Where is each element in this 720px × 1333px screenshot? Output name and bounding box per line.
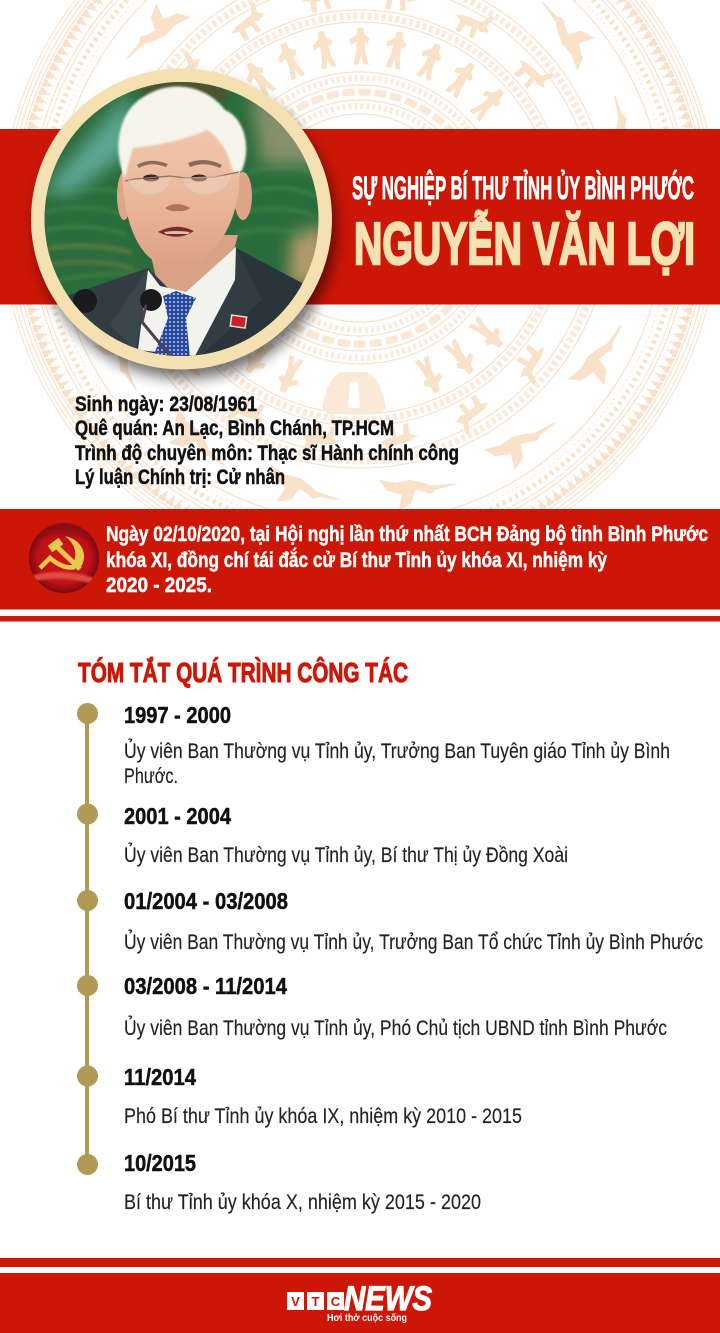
- portrait: [31, 68, 336, 379]
- drum figures: people ring: [245, 28, 504, 394]
- background: bronze drum ornament: [12, 0, 708, 509]
- palm fronds: [46, 167, 316, 280]
- timeline item 2001 - 2004: [77, 803, 568, 867]
- timeline item 11/2014: [77, 1064, 522, 1128]
- title text: [352, 170, 695, 277]
- tie: [153, 291, 196, 357]
- timeline item 10/2015: [77, 1150, 481, 1214]
- logo: VTC News: C: [331, 1294, 341, 1309]
- red banner: [0, 509, 720, 622]
- icon: party flag with hammer and sickle: [29, 522, 99, 593]
- timeline: [77, 702, 703, 1214]
- personal info block: [75, 393, 459, 489]
- personal info block: Sinh ngày: 23/08/1961: [75, 393, 257, 416]
- logo: VTC News: T: [312, 1294, 320, 1309]
- footer: [0, 1258, 720, 1333]
- timeline axis: [85, 713, 89, 1165]
- timeline item 01/2004 - 03/2008: [77, 888, 703, 954]
- timeline item 1997 - 2000: Phước.: [124, 765, 178, 788]
- hair: [118, 87, 246, 178]
- mouth: [158, 227, 194, 237]
- timeline item 03/2008 - 11/2014: [77, 973, 667, 1040]
- timeline item 01/2004 - 03/2008: 01/2004 - 03/2008: [124, 888, 288, 914]
- nose: [165, 204, 190, 211]
- suit: [68, 248, 301, 356]
- drum figure: stilt house: [322, 372, 386, 414]
- banner text: [106, 523, 708, 597]
- personal info block: Quê quán: An Lạc, Bình Chánh, TP.HCM: [75, 417, 394, 440]
- brows and eyes: [137, 161, 168, 168]
- timeline item 2001 - 2004: Ủy viên Ban Thường vụ Tỉnh ủy, Bí thư Thị ủy Đồng Xoài: [124, 843, 568, 867]
- drum figures: cranes ring: [94, 2, 626, 509]
- timeline item 11/2014: 11/2014: [124, 1064, 196, 1090]
- banner text: 2020 - 2025.: [106, 574, 212, 597]
- timeline item 1997 - 2000: 1997 - 2000: [124, 702, 231, 728]
- logo: VTC News: [287, 1280, 432, 1324]
- timeline item 10/2015: 10/2015: [124, 1150, 196, 1176]
- timeline item 11/2014: Phó Bí thư Tỉnh ủy khóa IX, nhiệm kỳ 2010 - 2015: [124, 1105, 522, 1128]
- personal info block: Trình độ chuyên môn: Thạc sĩ Hành chính công: [75, 442, 459, 465]
- heading: TÓM TẮT QUÁ TRÌNH CÔNG TÁC: [78, 656, 408, 688]
- ears: [117, 172, 128, 220]
- glasses: [125, 172, 239, 181]
- logo: VTC News: V: [291, 1294, 300, 1309]
- neck: [146, 235, 238, 294]
- drum figures: deer ring: [165, 0, 555, 457]
- title band: [0, 129, 720, 304]
- timeline item 1997 - 2000: [77, 702, 670, 788]
- logo: VTC News: Hơi thở cuộc sống: [327, 1312, 407, 1324]
- shirt: [138, 247, 236, 356]
- logo: VTC News: NEWS: [344, 1280, 432, 1318]
- face: [122, 128, 240, 260]
- party pin: [230, 315, 247, 328]
- timeline item 10/2015: Bí thư Tỉnh ủy khóa X, nhiệm kỳ 2015 - 2020: [124, 1191, 481, 1214]
- timeline item 03/2008 - 11/2014: 03/2008 - 11/2014: [124, 973, 287, 999]
- timeline item 2001 - 2004: 2001 - 2004: [124, 803, 231, 829]
- banner text: khóa XI, đồng chí tái đắc cử Bí thư Tỉnh ủy khóa XI, nhiệm kỳ: [106, 548, 607, 572]
- microphones: [73, 289, 97, 313]
- personal info block: Lý luận Chính trị: Cử nhân: [75, 466, 285, 489]
